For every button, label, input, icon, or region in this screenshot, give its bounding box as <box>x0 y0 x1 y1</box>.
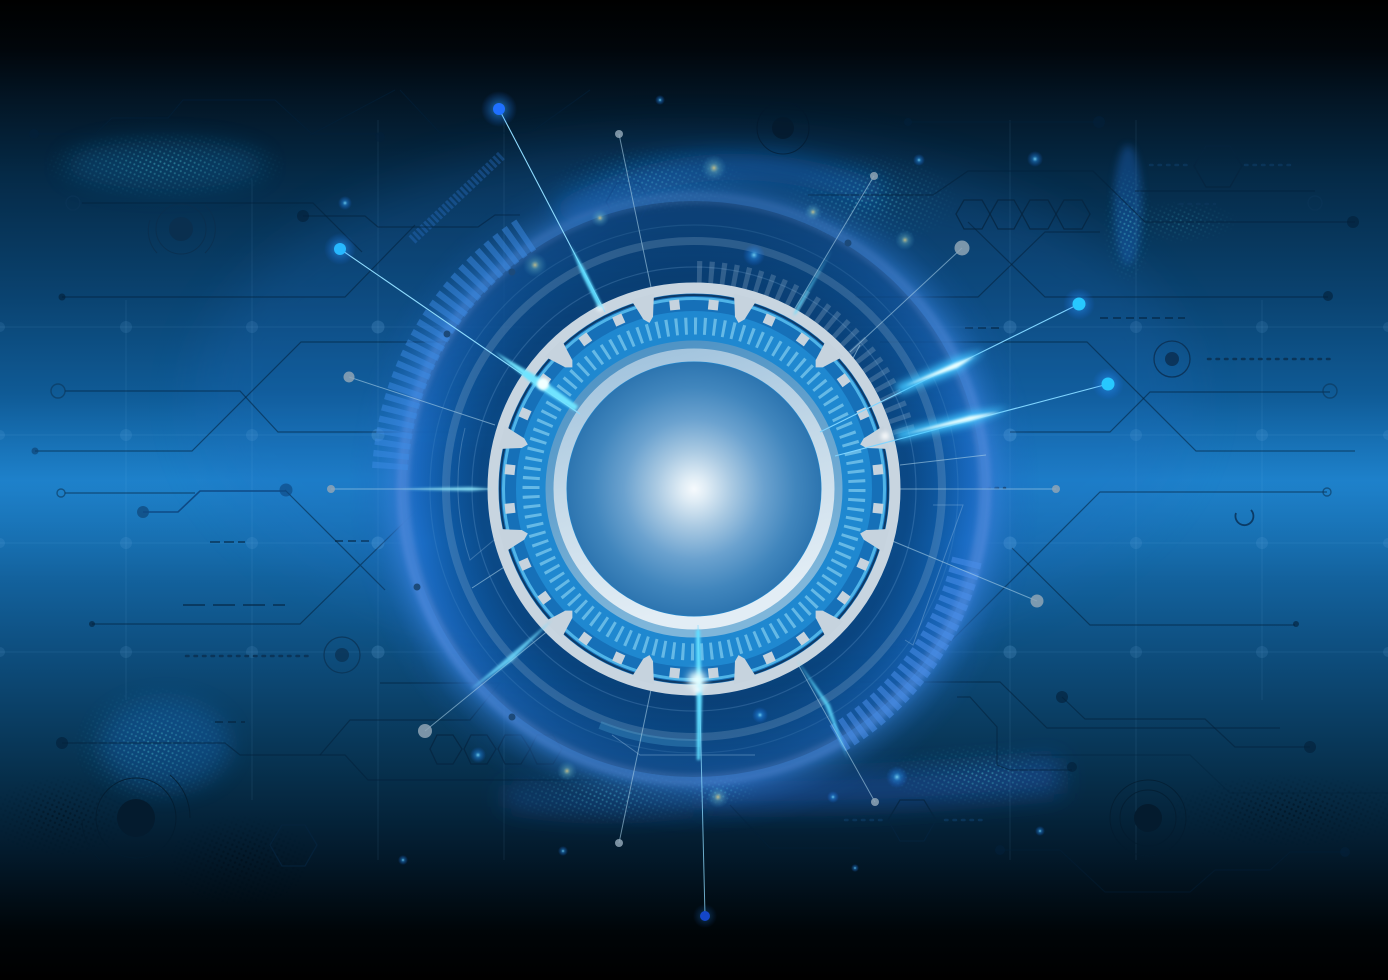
bright ray: upper left blue <box>481 91 605 312</box>
glowing sparks <box>338 95 1045 872</box>
bright ray: right lower <box>835 368 1124 456</box>
hatched arc: lower right <box>835 560 967 740</box>
target icon: right <box>1154 341 1190 377</box>
circuit end nodes <box>29 116 1359 857</box>
dotted traces <box>186 165 1330 820</box>
bright ray: bottom <box>688 625 717 928</box>
thin grey rays with end dots <box>327 130 1060 847</box>
blue ribbon glow: bottom left <box>505 795 700 804</box>
inner steel-blue ring <box>550 345 838 633</box>
target icon: upper left <box>148 204 215 254</box>
target icon: lower left small <box>324 637 360 673</box>
blue ribbon glow: left lower patch <box>100 701 230 789</box>
small arc icon <box>1235 510 1253 525</box>
hatched arc: upper left <box>390 232 530 469</box>
inner white ring <box>560 355 828 623</box>
bright streak: lower right <box>797 660 848 760</box>
bright streak: lower left <box>470 620 552 690</box>
thin arcs <box>500 295 888 683</box>
inner circuit rings <box>430 225 963 755</box>
bright streak: left horizontal <box>400 487 492 491</box>
ring glints <box>597 305 889 694</box>
radial ticks <box>531 326 857 652</box>
diagonal dashed band upper left <box>412 155 502 240</box>
central disc <box>567 362 821 616</box>
blue trace with nodes <box>143 491 286 512</box>
circuit traces <box>34 90 1388 892</box>
central gear ring <box>488 283 900 695</box>
tick band base <box>516 311 872 667</box>
hollow circuit nodes <box>51 196 1337 497</box>
inner small dark nodes <box>414 240 852 720</box>
bright ray: right upper <box>820 288 1095 432</box>
target icon: bottom left <box>82 775 190 860</box>
outer blue halo <box>372 171 1018 820</box>
blue ribbon glow: upper left patch <box>65 141 265 189</box>
bright streak: upper right <box>793 250 832 316</box>
hexagons <box>270 146 1242 866</box>
bright ray: left cyan <box>324 233 580 414</box>
ring base <box>488 283 900 695</box>
grid lines and grid nodes <box>0 120 1388 860</box>
blue ribbon glow: bottom right <box>700 775 1060 791</box>
blue ribbon glow: upper right strip <box>1114 145 1142 265</box>
halftone dot patches <box>26 136 1352 865</box>
triangles <box>499 294 889 684</box>
squares <box>505 300 883 678</box>
target icon: top <box>757 102 809 154</box>
outer pale ring <box>493 288 895 690</box>
target icon: bottom right <box>1110 780 1186 856</box>
blue ribbon glow: top <box>560 167 880 215</box>
